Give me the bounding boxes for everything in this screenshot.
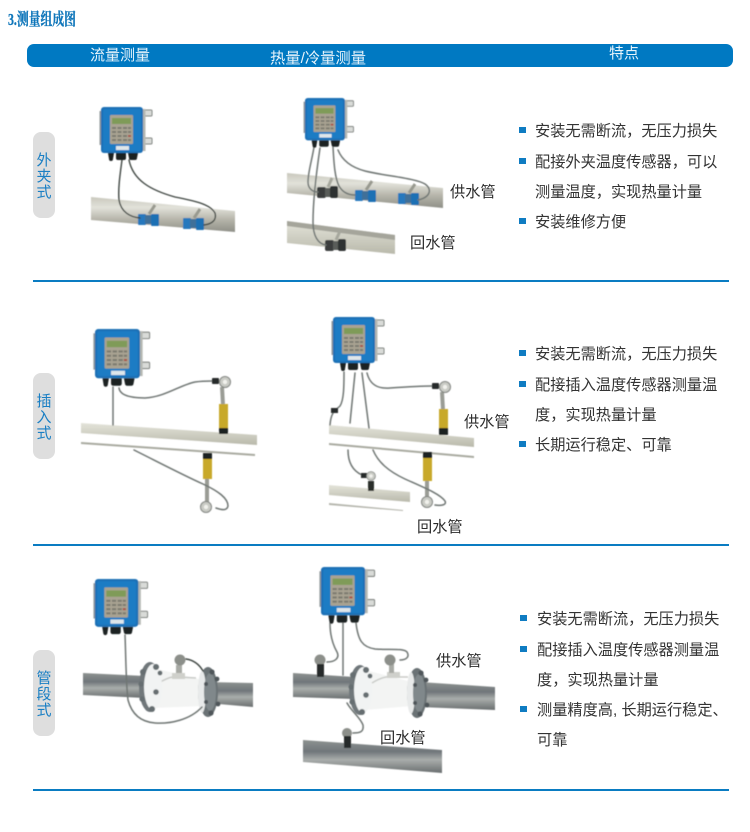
label: supply pipe: 供水管 [436, 653, 482, 670]
diagram: insertion heat measurement [329, 317, 474, 511]
label: supply pipe: 供水管 [464, 414, 510, 431]
label: return pipe: 回水管 [380, 730, 426, 747]
diagram: spool-piece heat measurement [293, 567, 495, 773]
side tab: insertion [33, 373, 55, 459]
feature list: insertion: 安装无需断流，无压力损失 [535, 346, 717, 363]
panel: spool-piece row [33, 567, 728, 773]
feature list: insertion: 长期运行稳定、可靠 [535, 437, 672, 454]
side tab: clamp-on: 式 [36, 184, 52, 201]
feature list: spool piece: 安装无需断流，无压力损失 [537, 611, 719, 628]
side tab: clamp-on: 夹 [36, 168, 52, 185]
header: features: 特点 [609, 45, 639, 62]
side tab: spool piece [33, 650, 55, 736]
label: return pipe: 回水管 [410, 235, 456, 252]
feature list: insertion [519, 346, 717, 454]
side tab: clamp-on: 外 [36, 152, 52, 169]
diagram: spool-piece flow measurement [83, 579, 253, 723]
diagram: insertion flow measurement [81, 329, 257, 512]
feature list: spool piece: 测量精度高, 长期运行稳定、 [537, 702, 728, 719]
panel: clamp-on row [33, 98, 717, 254]
label: supply pipe: 供水管 [450, 184, 496, 201]
feature list: insertion: 度，实现热量计量 [535, 407, 656, 424]
side tab: insertion: 插 [36, 393, 52, 410]
panel: insertion row [33, 317, 717, 536]
header bar [27, 44, 733, 67]
feature list: clamp-on: 配接外夹温度传感器，可以 [535, 154, 717, 171]
header: heat and cooling measurement: 热量/冷量测量 [270, 50, 366, 67]
side tab: insertion: 入 [36, 409, 52, 426]
label: return pipe: 回水管 [417, 519, 463, 536]
feature list: clamp-on: 安装维修方便 [535, 214, 626, 231]
side tab: spool piece: 管 [36, 670, 52, 687]
feature list: spool piece [520, 611, 728, 749]
feature list: clamp-on [519, 123, 717, 231]
side tab: insertion: 式 [36, 425, 52, 442]
header: flow measurement: 流量测量 [90, 47, 150, 64]
side tab: clamp-on [33, 132, 55, 218]
feature list: insertion: 配接插入温度传感器测量温 [535, 377, 717, 394]
diagram: clamp-on heat measurement [287, 98, 443, 254]
title: 3.测量组成图 [8, 10, 76, 29]
feature list: spool piece: 配接插入温度传感器测量温 [537, 642, 719, 659]
side tab: spool piece: 段 [36, 686, 52, 703]
side tab: spool piece: 式 [36, 702, 52, 719]
feature list: clamp-on: 安装无需断流，无压力损失 [535, 123, 717, 140]
feature list: spool piece: 度，实现热量计量 [537, 672, 658, 689]
feature list: clamp-on: 测量温度，实现热量计量 [535, 184, 702, 201]
diagram: clamp-on flow measurement [91, 107, 235, 232]
feature list: spool piece: 可靠 [537, 732, 567, 749]
